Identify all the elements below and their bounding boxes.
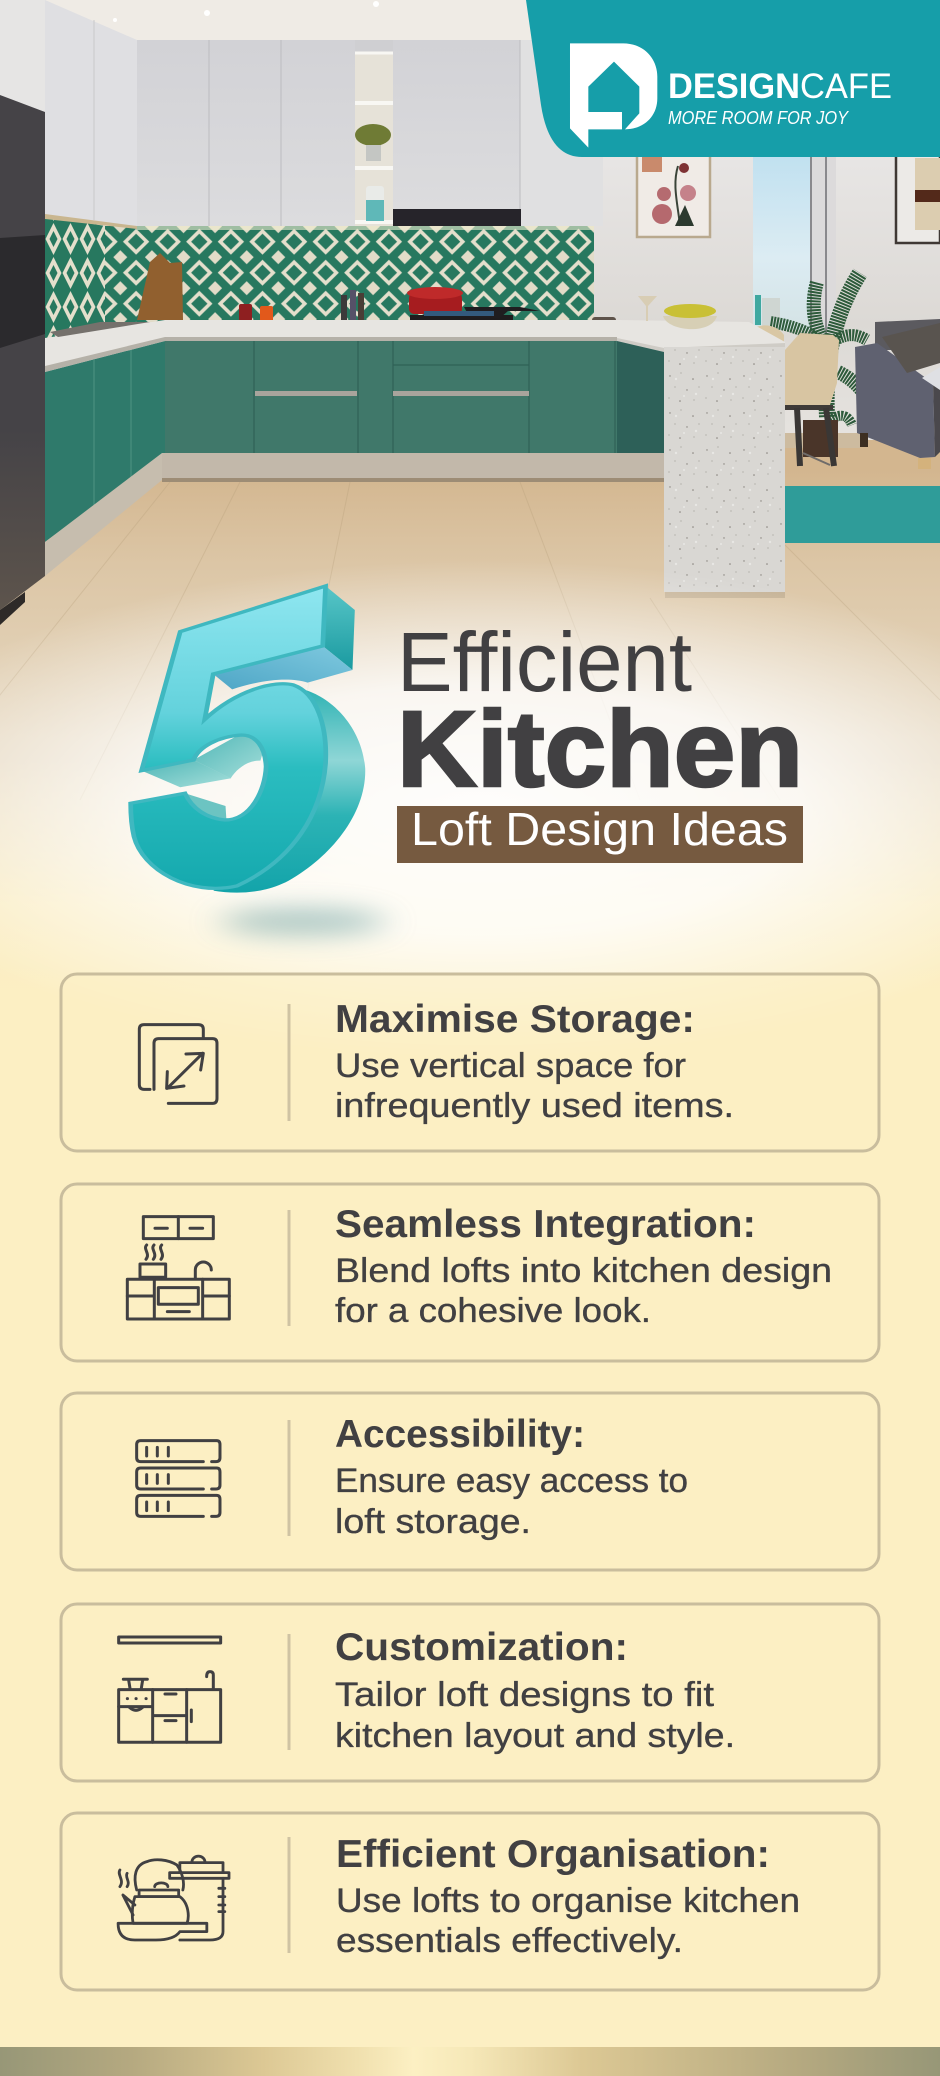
divider	[288, 1004, 290, 1121]
icon: stacked shelves	[137, 1441, 220, 1516]
inner hole wall	[193, 733, 268, 778]
description: loft storage.	[335, 1503, 531, 1541]
card frame	[61, 974, 879, 1151]
brand name second part: CAFE	[800, 67, 892, 106]
icon: kettle and jar	[118, 1856, 229, 1940]
cocktail glass	[638, 296, 657, 321]
card frame	[61, 1604, 879, 1781]
left bar underside	[142, 760, 231, 787]
heading: Maximise Storage:	[335, 998, 695, 1041]
top bar extrusion	[323, 586, 355, 670]
bottles	[341, 290, 364, 321]
kick plate	[45, 453, 665, 576]
teal rug	[785, 486, 940, 543]
heading: Efficient Organisation:	[336, 1833, 770, 1876]
back wall	[0, 40, 940, 440]
wall art: flowers	[637, 150, 710, 237]
red and orange cups	[239, 304, 273, 323]
bottom gradient strip	[0, 2047, 940, 2076]
peninsula column	[664, 347, 785, 598]
title line: Efficient: Efficient	[397, 615, 692, 709]
panel: efficient organisation	[61, 1813, 879, 1990]
left upper cabinets	[45, 0, 137, 226]
hob and pan	[410, 307, 540, 326]
description	[335, 1676, 735, 1755]
heading: Seamless Integration:	[335, 1203, 756, 1246]
palm plant	[770, 273, 870, 425]
floor planks	[0, 482, 940, 800]
fridge	[0, 95, 45, 625]
heading: Customization:	[335, 1626, 628, 1669]
base cabinets	[45, 341, 665, 542]
fade: cream wash	[0, 760, 940, 1000]
mortar and pestle	[555, 317, 617, 329]
subtitle banner	[397, 806, 803, 863]
fade: white glow	[0, 560, 940, 1060]
description: Use lofts to organise kitchen	[336, 1882, 800, 1920]
stool chairs	[744, 325, 839, 466]
panel: customization	[61, 1604, 879, 1781]
title block	[397, 615, 803, 863]
chimney hood	[393, 209, 521, 228]
description: Ensure easy access to	[335, 1462, 688, 1500]
floor	[0, 440, 940, 1000]
plant basket	[803, 420, 838, 457]
ceiling lights	[113, 1, 379, 22]
divider	[288, 1837, 290, 1953]
subtitle text: Loft Design Ideas	[411, 803, 788, 855]
sofa	[855, 319, 940, 469]
divider	[288, 1420, 290, 1536]
divider	[288, 1634, 290, 1750]
description	[336, 1882, 800, 1960]
window	[753, 150, 836, 335]
description: Blend lofts into kitchen design	[335, 1252, 832, 1290]
front face	[131, 586, 326, 888]
red cooking pot	[407, 287, 463, 314]
ceiling	[0, 0, 940, 60]
card frame	[61, 1393, 879, 1570]
icon: expand storage	[139, 1025, 217, 1103]
panel: seamless integration	[61, 1184, 879, 1361]
card frame	[61, 1813, 879, 1990]
backsplash	[45, 214, 594, 345]
description: Tailor loft designs to fit	[335, 1676, 714, 1714]
divider	[288, 1210, 290, 1326]
description: Use vertical space for	[335, 1047, 686, 1085]
card frame	[61, 1184, 879, 1361]
teal tab shape	[526, 0, 940, 157]
wooden boards	[137, 253, 183, 320]
panel: accessibility	[61, 1393, 879, 1570]
fruit bowl on bar	[663, 304, 717, 329]
icon: kitchen unit	[127, 1217, 229, 1319]
description: for a cohesive look.	[335, 1292, 651, 1330]
open niche shelves	[355, 40, 393, 226]
left wall	[0, 0, 45, 120]
icon: custom kitchen layout	[119, 1637, 221, 1742]
skirting right	[785, 433, 860, 448]
countertop	[45, 320, 785, 372]
big 3D number 5	[131, 586, 385, 936]
description: infrequently used items.	[335, 1087, 734, 1125]
title line: Kitchen: Kitchen	[397, 688, 803, 809]
description	[335, 1047, 734, 1125]
number shadow	[220, 908, 385, 936]
description: essentials effectively.	[336, 1922, 683, 1960]
panel: maximise storage	[61, 974, 879, 1151]
logo tab	[526, 0, 940, 157]
lower hole wall	[185, 793, 226, 821]
hero photo: kitchen interior	[0, 0, 940, 1060]
tagline: MORE ROOM FOR JOY	[668, 108, 850, 128]
top bar underside	[213, 646, 352, 689]
heading: Accessibility:	[335, 1413, 585, 1456]
description: kitchen layout and style.	[335, 1717, 735, 1755]
description	[335, 1252, 832, 1330]
icon: Design Cafe mark	[570, 43, 657, 148]
upper cabinets	[137, 40, 603, 226]
brand name: DESIGN	[668, 67, 800, 106]
wall art: landscape	[896, 150, 940, 243]
bowl extrusion	[213, 689, 365, 893]
description	[335, 1462, 688, 1541]
